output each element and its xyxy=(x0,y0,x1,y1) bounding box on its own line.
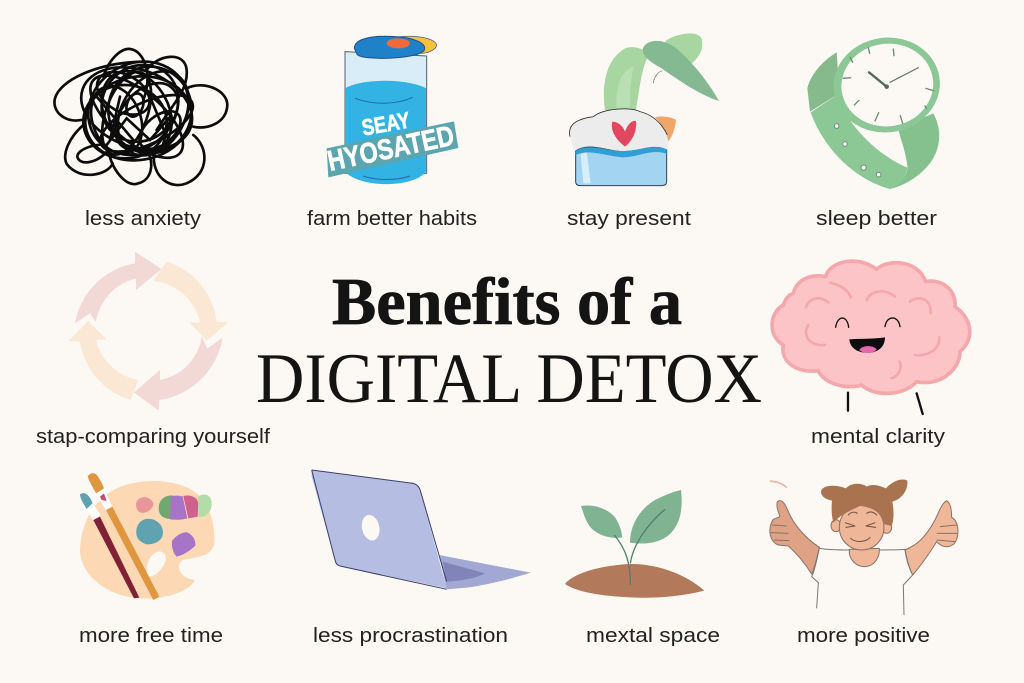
panel: mental clarity xyxy=(772,261,970,448)
label: mextal space: mextal space xyxy=(586,625,720,647)
panel: sleep better xyxy=(807,31,946,230)
panel: less procrastination xyxy=(312,470,531,647)
icon: paint palette and brushes xyxy=(80,473,215,600)
label: stay present: stay present xyxy=(567,208,691,230)
icon: green wristwatch xyxy=(807,31,946,189)
label: farm better habits: farm better habits xyxy=(307,208,477,230)
label: less anxiety: less anxiety xyxy=(85,208,201,230)
panel: mental space xyxy=(565,490,720,647)
label: less procrastination: less procrastination xyxy=(313,625,508,647)
panel: more positive xyxy=(770,480,958,647)
panel: stop comparing yourself xyxy=(36,252,270,448)
label: more free time: more free time xyxy=(79,625,223,647)
label: mental clarity: mental clarity xyxy=(811,426,945,448)
icon: circular arrows xyxy=(68,252,228,411)
icon: sprout in soil xyxy=(565,490,704,598)
panel: more free time xyxy=(79,473,223,647)
icon: water bottle: HYOSATED xyxy=(325,120,457,178)
title line 2: DIGITAL DETOX xyxy=(256,340,762,418)
icon: black scribble xyxy=(54,44,227,185)
panel: less anxiety xyxy=(54,44,227,230)
label: sleep better: sleep better xyxy=(816,208,937,230)
icon: water bottle xyxy=(325,36,458,184)
icon: water bottle: SEAY xyxy=(360,107,412,141)
icon: smiling brain xyxy=(772,261,970,414)
label: more positive: more positive xyxy=(797,625,930,647)
panel: stay present xyxy=(567,33,719,230)
icon: purple laptop xyxy=(312,470,531,589)
title line 1: Benefits of a xyxy=(332,265,682,339)
label: stap-comparing yourself: stap-comparing yourself xyxy=(36,426,270,448)
icon: child giving thumbs up xyxy=(770,480,958,615)
panel: farm better habits xyxy=(307,36,477,230)
title xyxy=(256,265,762,418)
icon: plant and heart box xyxy=(569,33,719,186)
